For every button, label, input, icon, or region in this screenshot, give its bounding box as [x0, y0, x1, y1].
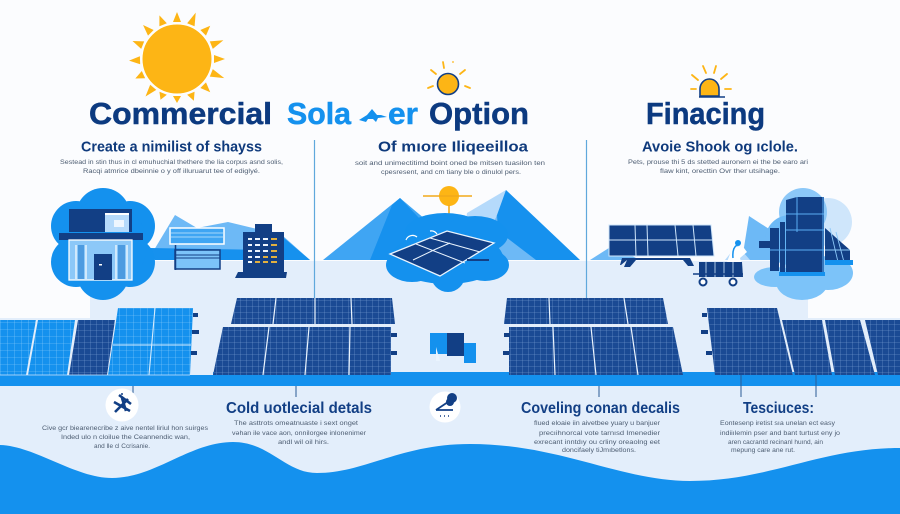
connector ticks: [133, 375, 816, 397]
detail block four: Eontesenp iretist sıa unelan ect easy: [720, 420, 836, 427]
solar array: far right: [701, 308, 900, 375]
detail block three: [521, 400, 680, 454]
detail block three: doncifaely tiJmıbetlons.: [562, 447, 636, 454]
column one intro: [60, 138, 283, 175]
detail block four: [720, 400, 840, 454]
icon: crossed tools badge: [106, 388, 138, 422]
icon: panel cart: [693, 262, 743, 286]
detail block two: The asttrots omeatnuaste i sext onget: [234, 420, 358, 427]
column two intro: soit and unimectitimd boint oned be mitsen tuasilon ten: [355, 160, 545, 167]
icon: data center block: [759, 197, 853, 276]
icon: tilted solar panel: [390, 231, 494, 276]
icon: sun behind array: [423, 186, 472, 215]
scene: commercial buildings: [51, 188, 310, 300]
icon: storefront: [59, 209, 143, 280]
alarm style sun icon: [691, 66, 731, 97]
icon: cloud: [754, 188, 853, 300]
column one intro: Racqi atmrice dbeinnie o y off illuruarut tee of ediglyé.: [83, 168, 260, 175]
column one intro: Create a nimilist of shayss: [81, 138, 262, 156]
detail block four: indiiılemin pser and bant turtust eny jo: [720, 430, 840, 437]
column three intro: flaw kint, orecttin Ovr ther utsihage.: [660, 168, 780, 175]
solar array: centre right: [503, 298, 683, 375]
small central blocks icon: [430, 333, 476, 363]
column three intro: Avoie Shook og ıclole.: [642, 138, 798, 156]
icon: office tower: [235, 224, 287, 278]
column one intro: Sestead in stin thus in cl emuhuchial thethere the lia corpus asnd solis,: [60, 159, 283, 166]
icon: garage: [170, 228, 224, 270]
detail block three: flued eloaie iin aivetbee yuary u banjuer: [534, 420, 661, 427]
detail text one: [42, 425, 209, 450]
detail block three: precıihnorcal vote tarnısd Imenedier: [539, 430, 661, 437]
detail block three: Coveling conan decalis: [521, 400, 680, 417]
title: [89, 96, 765, 131]
icon: helper figure: [727, 240, 747, 262]
solar array: far left: [0, 308, 199, 375]
detail text one: Cive gcr biearenecribe z aive nentel liriul hon suirges: [42, 425, 209, 432]
column three intro: [628, 138, 809, 175]
title: Sola: [287, 96, 352, 131]
detail block two: andl wil oil hirs.: [278, 439, 329, 446]
solar array: centre left: [213, 298, 397, 375]
column two intro: cpesresent, and cm tiany ble o dinulol pers.: [381, 169, 521, 176]
large sun icon: [129, 11, 226, 103]
icon: cloud: [386, 213, 509, 292]
title: Commercial: [89, 96, 272, 131]
detail block four: mepung care ane rut.: [731, 447, 795, 454]
icon: brush badge: [430, 392, 460, 422]
title: Finacing: [646, 96, 765, 131]
icon: cloud: [51, 188, 155, 300]
detail block two: [226, 400, 372, 446]
column two intro: [355, 138, 545, 176]
detail block two: vəhan ile vace aon, onnilorgee inlonenimer: [232, 430, 367, 437]
title: er: [388, 96, 418, 131]
title: Option: [429, 96, 529, 131]
detail block two: Cold uotlecial detals: [226, 400, 372, 417]
small sun icon: [428, 62, 470, 94]
bottom blue wave: [0, 442, 900, 514]
blue ground strip: [0, 372, 900, 386]
detail block three: exrecant inntdıy ou crliny oreaolng eet: [534, 439, 660, 446]
icon: ground mounted panel: [609, 225, 714, 267]
scene: mountain solar array: [323, 186, 580, 292]
detail block four: Tesciuces:: [743, 400, 814, 417]
column two intro: Of mıore Iliqeeilloa: [378, 138, 529, 156]
pale ground band: [0, 261, 900, 514]
detail block four: aren cacrantd recinanl huınd, ain: [728, 439, 823, 446]
column dividers: [314, 140, 586, 298]
column three intro: Pets, prouse thi 5 ds stetted auronern ei the be earo ari: [628, 159, 809, 166]
scene: financing equipment: [590, 188, 853, 300]
detail text one: Inded ulo n cloilue the Ceannendic wan,: [61, 434, 190, 441]
detail text one: and lle cl Ccrisanie.: [94, 443, 150, 450]
